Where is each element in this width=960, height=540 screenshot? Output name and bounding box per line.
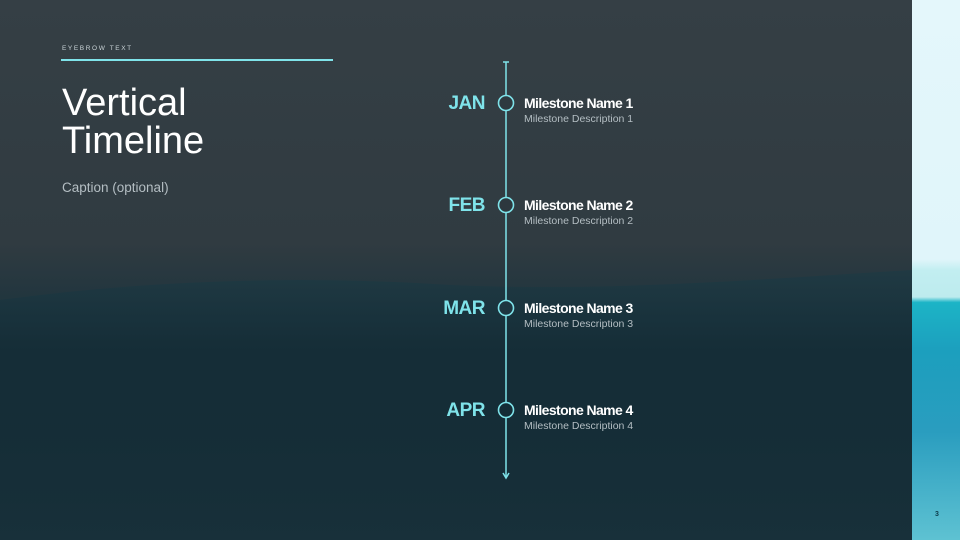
text: FEB bbox=[448, 195, 485, 216]
text: Milestone Description 2 bbox=[524, 215, 633, 227]
timeline bbox=[498, 61, 514, 480]
text: Milestone Description 4 bbox=[524, 420, 633, 432]
divider bbox=[61, 59, 333, 61]
title: Timeline bbox=[62, 120, 204, 162]
text: Milestone Name 3 bbox=[524, 300, 633, 316]
milestone 3 bbox=[443, 298, 633, 330]
milestone 4 bbox=[446, 400, 634, 432]
text: APR bbox=[446, 400, 485, 421]
text: Milestone Description 3 bbox=[524, 318, 633, 330]
milestone 2 bbox=[448, 195, 633, 227]
caption: Caption (optional) bbox=[62, 180, 169, 195]
text: Milestone Name 4 bbox=[524, 402, 633, 418]
text: Milestone Description 1 bbox=[524, 113, 633, 125]
title: Vertical bbox=[62, 82, 187, 124]
text: Milestone Name 2 bbox=[524, 197, 633, 213]
eyebrow text: EYEBROW TEXT bbox=[62, 45, 133, 52]
page number: 3 bbox=[935, 511, 939, 518]
text: Milestone Name 1 bbox=[524, 95, 633, 111]
milestone 1 bbox=[448, 93, 633, 125]
title bbox=[62, 82, 204, 162]
text: JAN bbox=[448, 93, 485, 114]
right strip image bbox=[912, 0, 960, 540]
text: MAR bbox=[443, 298, 485, 319]
